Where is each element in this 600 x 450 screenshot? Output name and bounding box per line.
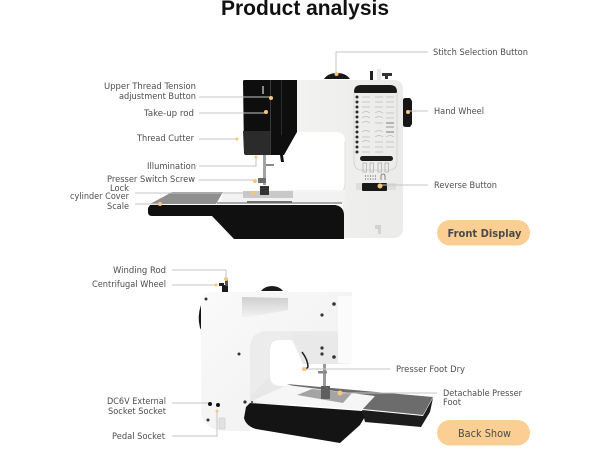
black head <box>243 80 297 155</box>
label: Reverse Button <box>378 181 497 191</box>
label: Presser Foot Dry: Presser Foot Dry <box>396 365 466 375</box>
label: Stitch Selection Button: Stitch Selection Button <box>433 48 528 58</box>
needle assembly rear <box>318 364 330 399</box>
label: Detachable Presser Foot: Detachable Presser <box>443 389 522 399</box>
label: Presser Foot Dry <box>302 365 466 375</box>
stitch panel <box>354 85 397 180</box>
label: Detachable Presser Foot: Foot <box>443 398 461 408</box>
label: Presser Switch Screw <box>107 175 257 185</box>
bed top grey panel <box>150 192 223 204</box>
hand wheel <box>403 98 412 127</box>
label: Detachable Presser Foot <box>338 389 522 408</box>
black base rear <box>244 403 366 443</box>
label: Illumination: Illumination <box>147 162 196 172</box>
sliding plate <box>219 192 345 204</box>
front sewing machine illustration <box>148 69 412 239</box>
foot latch <box>375 225 381 234</box>
arch opening <box>270 340 352 404</box>
label: Winding Rod: Winding Rod <box>113 266 166 276</box>
badge: Back Show <box>437 420 530 446</box>
label: Hand Wheel <box>406 107 484 117</box>
top fittings <box>261 286 283 291</box>
bed underside rear <box>362 398 433 427</box>
white plate rear <box>252 385 375 410</box>
back screws <box>204 298 336 422</box>
label: Scale <box>107 202 162 212</box>
metal needle plate <box>297 389 352 403</box>
label: Presser Switch Screw: Presser Switch Screw <box>107 175 195 185</box>
badge: Back Show: Back Show <box>458 428 511 440</box>
label: DC6V External Socket Socket: Socket Socket <box>108 407 166 417</box>
body back <box>201 292 352 431</box>
label: DC6V External Socket Socket: DC6V External <box>107 397 166 407</box>
needle and presser assembly <box>258 155 274 195</box>
rear sewing machine illustration <box>199 279 433 443</box>
bed top grey rear <box>287 384 433 415</box>
head shading <box>292 333 338 364</box>
white body <box>283 80 403 238</box>
inner arch wall <box>250 331 340 403</box>
label: Lock: Lock <box>110 184 130 194</box>
label: cylinder Cover: cylinder Cover <box>70 192 129 202</box>
label: Thread Cutter <box>136 134 238 144</box>
hand wheel back <box>199 304 203 330</box>
label: DC6V External Socket Socket <box>107 397 208 417</box>
label: Take-up rod: Take-up rod <box>143 109 194 119</box>
label: Upper Thread Tension adjustment Button <box>104 82 273 102</box>
label: Reverse Button: Reverse Button <box>434 181 497 191</box>
label: Centrifugal Wheel <box>92 280 218 290</box>
badge: Front Display <box>437 220 530 246</box>
label: Scale: Scale <box>107 202 129 212</box>
reverse button <box>356 183 396 191</box>
badge: Front Display: Front Display <box>448 228 522 240</box>
thread wire <box>302 352 308 370</box>
label: Upper Thread Tension adjustment Button: adjustment Button <box>119 92 196 102</box>
label: Thread Cutter: Thread Cutter <box>136 134 194 144</box>
label: Pedal Socket <box>112 410 218 442</box>
sockets <box>208 402 220 407</box>
spool pins and stitch dial <box>324 69 392 80</box>
carry handle recess <box>242 297 288 317</box>
label: Hand Wheel: Hand Wheel <box>434 107 484 117</box>
black base <box>148 205 344 239</box>
label: Pedal Socket: Pedal Socket <box>112 432 165 442</box>
label: Upper Thread Tension adjustment Button: Upper Thread Tension <box>104 82 196 92</box>
label: Centrifugal Wheel: Centrifugal Wheel <box>92 280 166 290</box>
label: Take-up rod <box>143 109 268 119</box>
arch opening <box>283 132 345 196</box>
label: Illumination <box>147 156 258 172</box>
label: Winding Rod <box>113 266 228 281</box>
label: Stitch Selection Button <box>334 48 528 76</box>
label: Lock <box>110 184 255 195</box>
